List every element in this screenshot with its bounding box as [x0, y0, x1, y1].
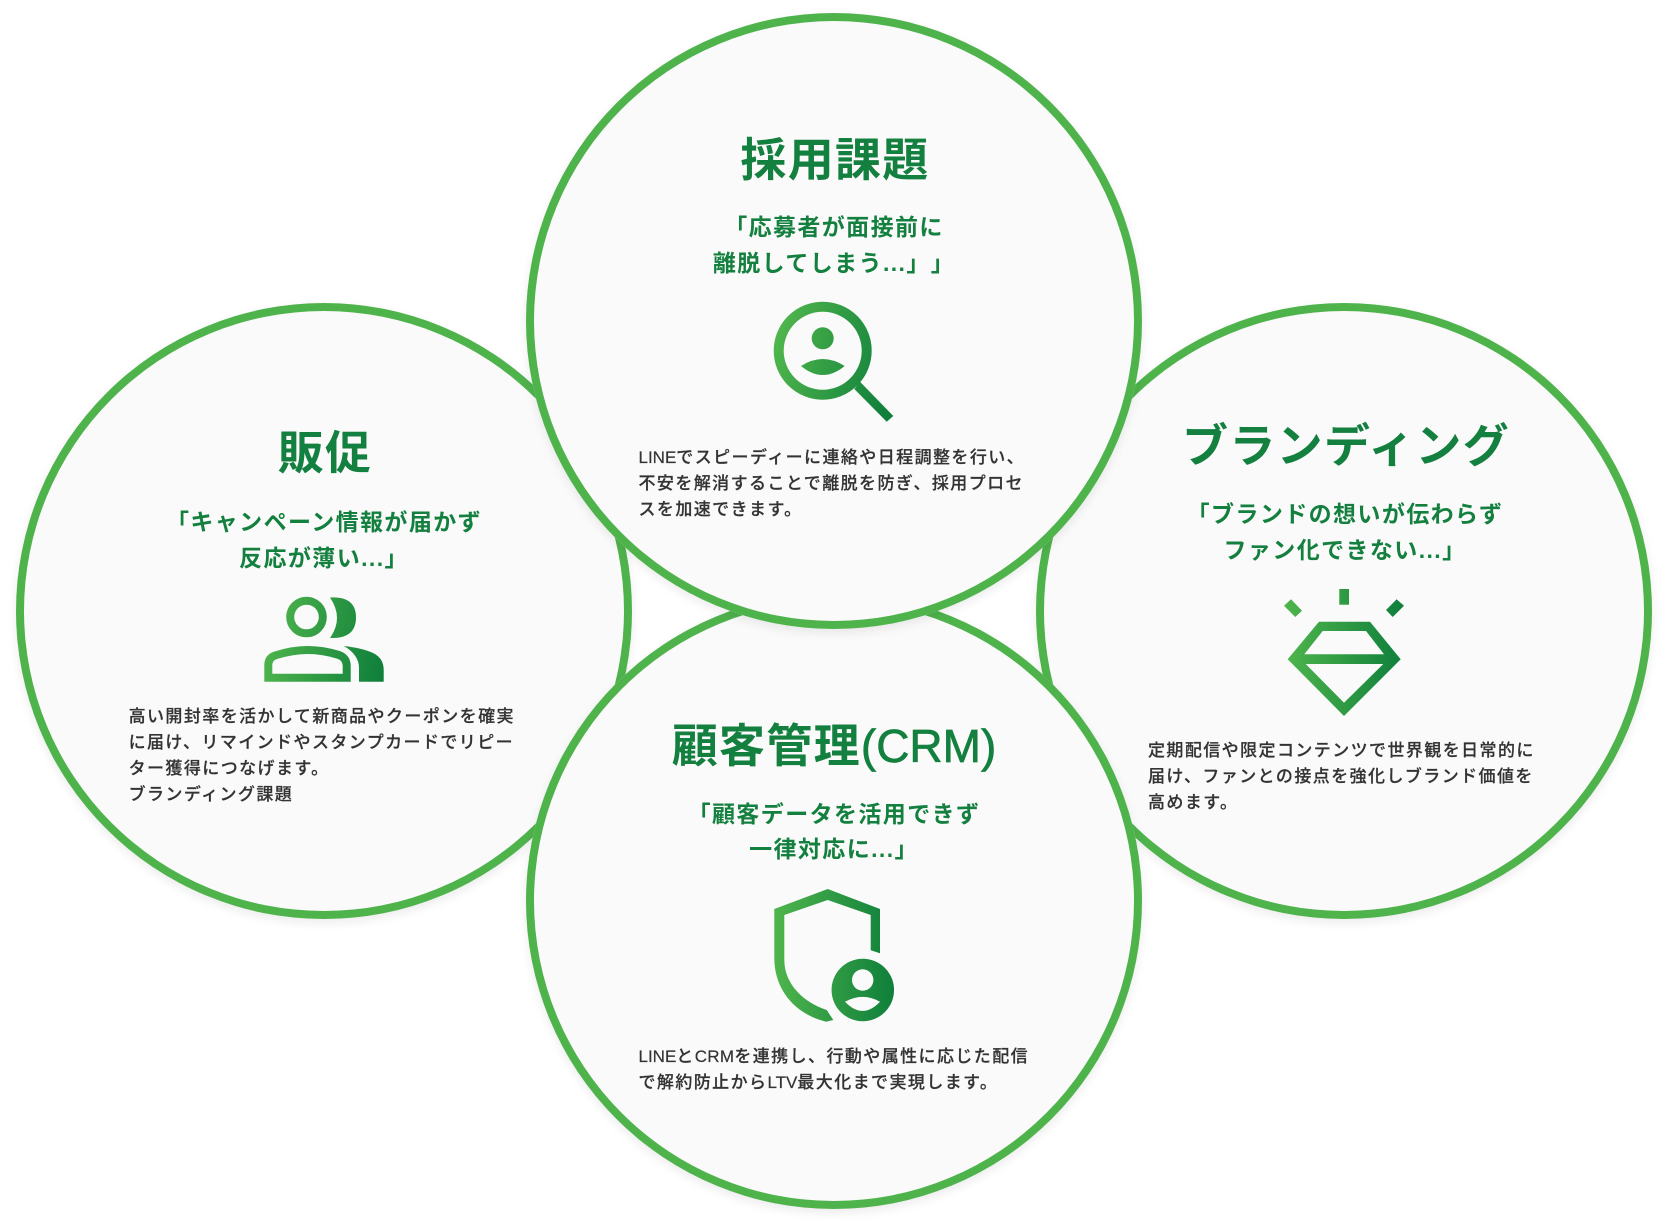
heading: ブランディング: ブランディング [1182, 420, 1510, 472]
quote: 販促 [166, 509, 482, 570]
body text: 採用課題: LINEでスピーディーに連絡や日程調整を行い、 [638, 448, 1025, 467]
body text: 顧客管理 [638, 1047, 1029, 1092]
icon: diamond [1284, 589, 1404, 716]
body text: 販促 [129, 707, 515, 804]
quote: 採用課題 [713, 214, 955, 276]
body text: ブランディング: 定期配信や限定コンテンツで世界観を日常的に [1148, 741, 1535, 760]
body text: 販促: 高い開封率を活かして新商品やクーポンを確実 [129, 707, 515, 726]
quote: 採用課題: 離脱してしまう...」」 [713, 250, 955, 276]
panel: ブランディング [1036, 303, 1652, 919]
heading: 顧客管理(CRM): 顧客管理(CRM) [672, 720, 996, 772]
quote: ブランディング [1187, 501, 1503, 562]
heading: 販促: 販促 [278, 427, 372, 479]
panel: 顧客管理(CRM) [526, 592, 1142, 1208]
body text: ブランディング [1148, 741, 1535, 812]
body text: 販促: に届け、リマインドやスタンプカードでリピー [129, 733, 514, 752]
quote: ブランディング: ファン化できない...」 [1224, 536, 1466, 562]
panel: 採用課題 [526, 13, 1142, 629]
icon: magnifier with user [774, 302, 894, 422]
quote: 採用課題: 「応募者が面接前に [724, 214, 944, 240]
quote: 顧客管理 [688, 800, 980, 862]
quote: ブランディング: 「ブランドの想いが伝わらず [1187, 501, 1503, 527]
body text: ブランディング: 届け、ファンとの接点を強化しブランド価値を [1148, 767, 1534, 786]
quote: 販促: 反応が薄い...」 [239, 544, 409, 570]
quote: 顧客管理: 一律対応に...」 [749, 836, 919, 862]
body text: 採用課題: スを加速できます。 [638, 500, 803, 519]
body text: ブランディング: 高めます。 [1148, 793, 1238, 812]
body text: 販促: ブランディング課題 [129, 785, 293, 804]
body text: 顧客管理: LINEとCRMを連携し、行動や属性に応じた配信 [638, 1047, 1029, 1066]
body text: 顧客管理: で解約防止からLTV最大化まで実現します。 [638, 1073, 998, 1092]
body text: 採用課題: 不安を解消することで離脱を防ぎ、採用プロセ [638, 474, 1024, 493]
body text: 販促: ター獲得につなげます。 [129, 759, 330, 778]
body text: 採用課題 [638, 448, 1025, 519]
panel: 販促 [16, 303, 632, 919]
quote: 顧客管理: 「顧客データを活用できず [688, 800, 980, 826]
icon: people [264, 596, 384, 682]
quote: 販促: 「キャンペーン情報が届かず [166, 509, 482, 535]
heading: 採用課題: 採用課題 [740, 134, 930, 186]
icon: shield with user [774, 889, 894, 1022]
